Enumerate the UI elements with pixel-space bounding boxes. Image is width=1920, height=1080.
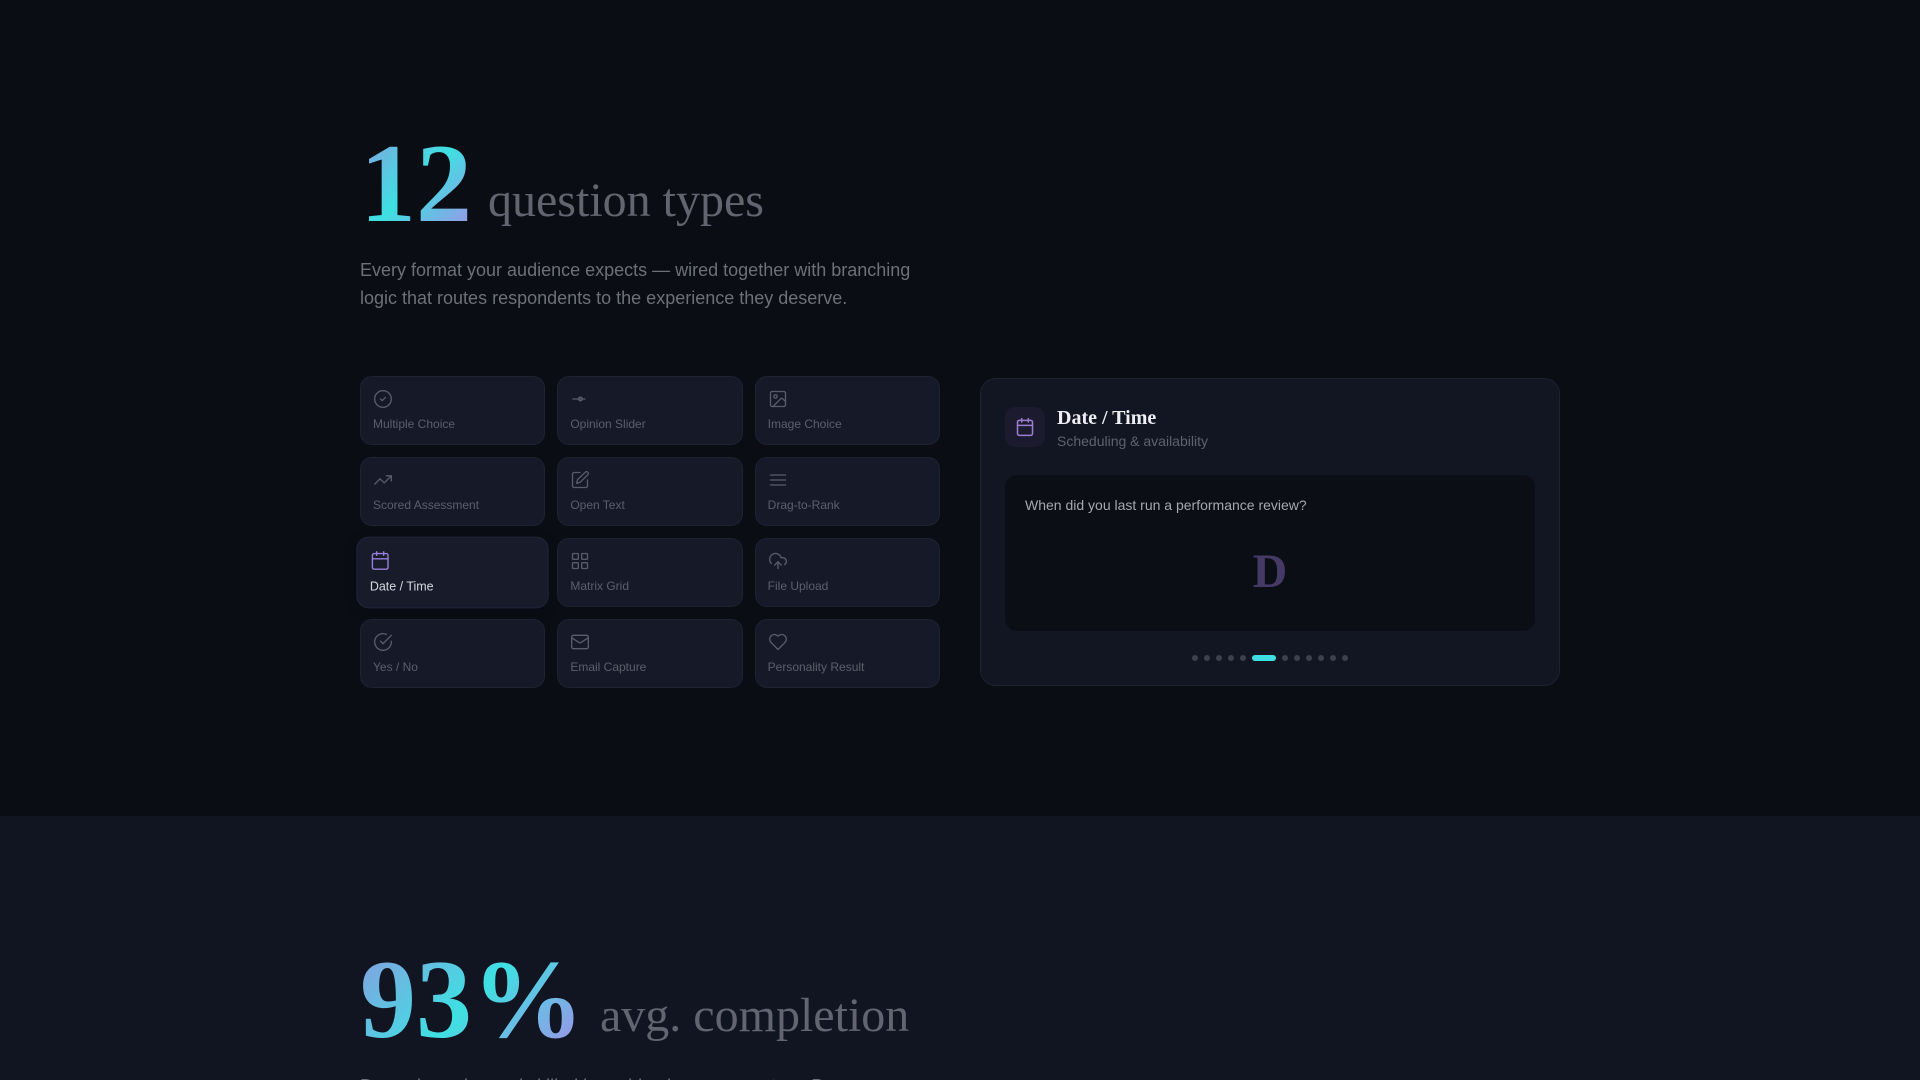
- preview letter D: D: [1253, 545, 1287, 598]
- card: Yes / No: Yes / No: [373, 660, 418, 674]
- card: Matrix Grid: Matrix Grid: [570, 579, 629, 593]
- panel: Date / Time preview: [980, 378, 1560, 686]
- card: Email Capture: Email Capture: [570, 660, 646, 674]
- heading: 93% avg. completion: avg. completion: [600, 989, 909, 1042]
- card: Drag-to-Rank: Drag-to-Rank: [768, 498, 840, 512]
- heading: 12 question types: 12: [360, 122, 472, 246]
- panel title: Date / Time: [1057, 407, 1156, 429]
- card: Open Text: Open Text: [570, 498, 625, 512]
- heading: 93% avg. completion: 93%: [360, 938, 584, 1062]
- text block: question types description: Every format your audience expects — wired together with branching: [360, 260, 910, 280]
- card: Multiple Choice: [360, 376, 545, 445]
- preview box: [1005, 475, 1535, 631]
- card: Yes / No: [360, 619, 545, 688]
- heading: 93% avg. completion: [360, 938, 909, 1062]
- card: File Upload: [755, 538, 940, 607]
- card grid: question types: [356, 376, 940, 688]
- card: Email Capture: [557, 619, 743, 688]
- heading: 12 question types: question types: [488, 174, 764, 227]
- text block: question types description: [360, 260, 910, 308]
- card: Scored Assessment: [360, 457, 545, 526]
- icon: calendar badge: [1005, 407, 1045, 447]
- card: Personality Result: [755, 619, 940, 688]
- card: Date / Time (active): [356, 537, 549, 608]
- question text: When did you last run a performance review?: [1025, 497, 1307, 513]
- section: lower band background: [0, 816, 1920, 1080]
- card: Scored Assessment: Scored Assessment: [373, 498, 479, 512]
- card: Drag-to-Rank: [755, 457, 940, 526]
- card: Date / Time (active): Date / Time: [370, 579, 434, 594]
- card: Opinion Slider: [557, 376, 743, 445]
- card: Image Choice: [755, 376, 940, 445]
- card: Multiple Choice: Multiple Choice: [373, 417, 455, 431]
- panel subtitle: Scheduling & availability: [1057, 433, 1208, 449]
- card: Matrix Grid: [557, 538, 743, 607]
- text block: question types description: logic that routes respondents to the experience they deserve.: [360, 288, 847, 308]
- card: Opinion Slider: Opinion Slider: [570, 417, 646, 431]
- heading: 12 question types: [360, 122, 764, 246]
- card: Open Text: [557, 457, 743, 526]
- pagination dots: [1192, 655, 1348, 661]
- card: File Upload: File Upload: [768, 579, 828, 593]
- card: Image Choice: Image Choice: [768, 417, 842, 431]
- card: Personality Result: Personality Result: [768, 660, 864, 674]
